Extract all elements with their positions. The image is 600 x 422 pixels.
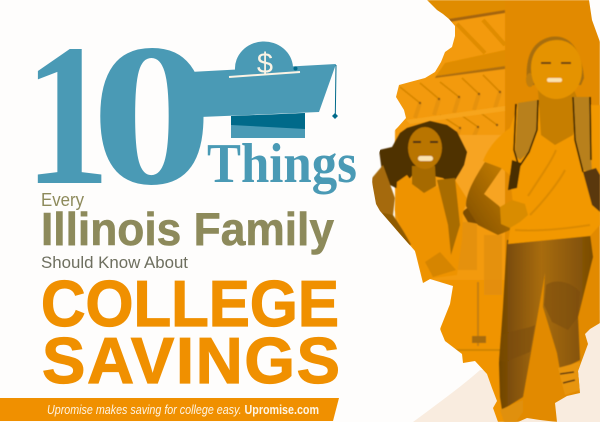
backpack straps [515, 100, 538, 160]
photo: small girl [372, 121, 480, 283]
cap underside [231, 113, 305, 138]
hand [500, 200, 528, 228]
photo: tall girl [466, 36, 600, 422]
text: Should Know About: Should Know About [41, 253, 188, 272]
far arm [462, 208, 478, 224]
buckle [508, 160, 521, 190]
digit 1: 1 [24, 2, 110, 227]
heading: College: COLLEGE [41, 267, 339, 340]
shirt folds [425, 252, 456, 277]
backpack strap [437, 178, 460, 255]
Illinois-shaped photo of two girls running [372, 0, 600, 422]
photo: ceiling and walls [395, 0, 600, 422]
strap edges [514, 97, 591, 172]
tassel [294, 65, 338, 119]
text: Every: Every [41, 190, 84, 210]
hair [379, 121, 467, 190]
ear [526, 73, 534, 87]
face [531, 40, 582, 99]
hair [527, 36, 584, 85]
title number 10 with graduation cap [24, 2, 338, 227]
shirt [395, 175, 468, 283]
dollar coin dome [235, 41, 293, 70]
left arm [382, 212, 412, 246]
dollar sign: $ [257, 48, 273, 80]
heading: Savings: SAVINGS [42, 324, 340, 397]
neck [538, 90, 578, 145]
digit 0: 0 [91, 2, 213, 227]
footer banner [0, 398, 339, 421]
neck and face [412, 166, 436, 193]
graduation cap board [190, 64, 336, 117]
heading: Things: Things [207, 133, 357, 195]
jeans [499, 234, 593, 410]
backpack left [372, 165, 395, 217]
photo: lower doors [455, 222, 502, 295]
coin slot [229, 72, 300, 77]
arm [466, 162, 515, 235]
heading: Illinois Family: Illinois Family [41, 203, 334, 255]
shirt [483, 105, 600, 244]
knee ribbing [499, 281, 580, 362]
shirt folds [515, 150, 590, 231]
cream background curve [413, 310, 600, 422]
shoes [558, 362, 580, 395]
banner text: Upromise makes saving for college easy. Upromise.com [47, 402, 319, 417]
